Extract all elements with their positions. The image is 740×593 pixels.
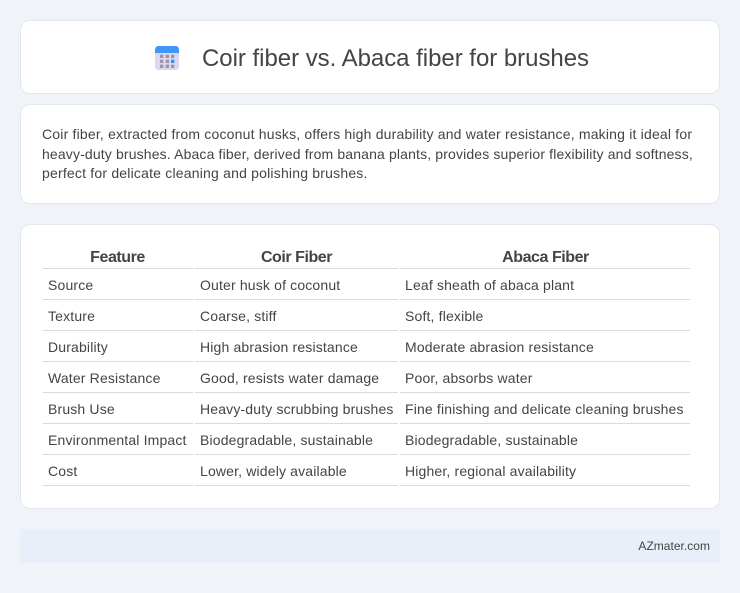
row: Water Resistance: Good, resists water damage bbox=[200, 370, 379, 386]
row: Brush Use: Fine finishing and delicate cleaning brushes bbox=[405, 401, 684, 417]
row: Durability: Durability bbox=[48, 339, 108, 355]
row: Source: Leaf sheath of abaca plant bbox=[405, 277, 574, 293]
footer bar bbox=[20, 529, 720, 563]
row: Durability: Moderate abrasion resistance bbox=[405, 339, 594, 355]
row: Environmental Impact: Environmental Impact bbox=[48, 432, 187, 448]
row: Source: Source bbox=[48, 277, 93, 293]
row: Texture bbox=[48, 308, 484, 324]
row: Texture: Coarse, stiff bbox=[200, 308, 277, 324]
header row bbox=[90, 249, 589, 266]
row: Cost bbox=[48, 463, 576, 479]
panel: comparison table bbox=[20, 224, 720, 509]
row: Source bbox=[48, 277, 574, 293]
title: Coir fiber vs. Abaca fiber for brushes bbox=[202, 45, 589, 72]
row: Cost: Lower, widely available bbox=[200, 463, 347, 479]
header row: Coir Fiber bbox=[261, 249, 332, 266]
row: Water Resistance bbox=[48, 370, 533, 386]
summary text: perfect for delicate cleaning and polishing brushes. bbox=[42, 165, 368, 181]
header row: Abaca Fiber bbox=[502, 249, 589, 266]
row: Durability: High abrasion resistance bbox=[200, 339, 358, 355]
row: Environmental Impact bbox=[48, 432, 578, 448]
row: Brush Use: Brush Use bbox=[48, 401, 115, 417]
row: Cost: Cost bbox=[48, 463, 77, 479]
summary text bbox=[42, 126, 693, 181]
summary text: Coir fiber, extracted from coconut husks, offers high durability and water resistance, making it ideal for bbox=[42, 126, 692, 142]
row: Source: Outer husk of coconut bbox=[200, 277, 340, 293]
row: Texture: Soft, flexible bbox=[405, 308, 484, 324]
icon: calendar bbox=[155, 46, 179, 70]
footer credit: AZmater.com bbox=[638, 539, 710, 553]
row: Brush Use bbox=[48, 401, 684, 417]
panel: summary bbox=[20, 104, 720, 204]
summary text: heavy-duty brushes. Abaca fiber, derived from banana plants, provides superior flexibility and softness, bbox=[42, 146, 693, 162]
row: Durability bbox=[48, 339, 594, 355]
row: Environmental Impact: Biodegradable, sustainable bbox=[200, 432, 373, 448]
row: Brush Use: Heavy-duty scrubbing brushes bbox=[200, 401, 394, 417]
panel: title card bbox=[20, 20, 720, 94]
row: Texture: Texture bbox=[48, 308, 95, 324]
row: Water Resistance: Poor, absorbs water bbox=[405, 370, 533, 386]
row: Environmental Impact: Biodegradable, sustainable bbox=[405, 432, 578, 448]
row: Cost: Higher, regional availability bbox=[405, 463, 576, 479]
row: Water Resistance: Water Resistance bbox=[48, 370, 161, 386]
header row: Feature bbox=[90, 249, 145, 266]
